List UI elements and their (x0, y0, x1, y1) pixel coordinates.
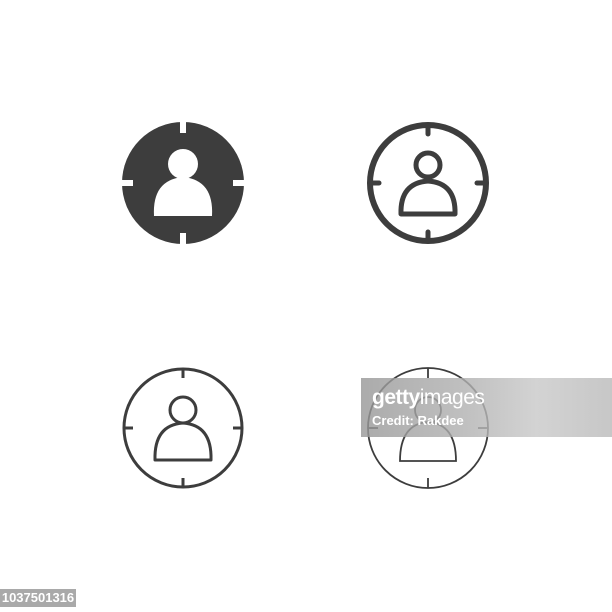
icon: medium outline target person (124, 369, 242, 487)
watermark logo text: gettyimages (372, 386, 484, 409)
watermark band (361, 378, 612, 437)
icon: solid target person (120, 120, 246, 246)
watermark credit: Credit: Rakdee (372, 413, 464, 428)
icon: thin outline target person (368, 368, 488, 488)
icon: bold outline target person (370, 125, 486, 241)
image id tag: 1037501316 (2, 590, 74, 605)
